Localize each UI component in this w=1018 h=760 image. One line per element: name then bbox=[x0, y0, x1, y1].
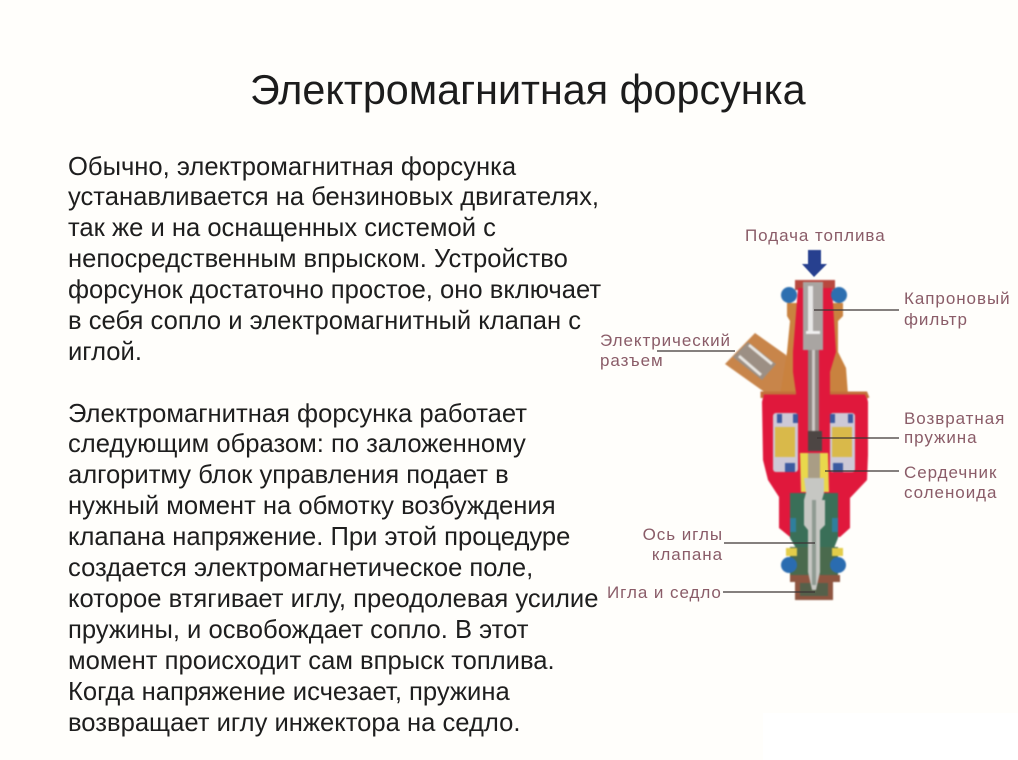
label: electrical connector: Электрический bbox=[600, 331, 731, 350]
text block: intro paragraph: Обычно, электромагнитная форсунка bbox=[68, 152, 516, 180]
orange sleeve bbox=[780, 303, 848, 395]
icon: fuel supply arrow bbox=[802, 250, 827, 277]
top cap bbox=[795, 280, 835, 290]
right solenoid coil bbox=[830, 413, 855, 472]
text block: intro paragraph: непосредственным впрыском. Устройство bbox=[68, 245, 568, 273]
text block: how it works paragraph: Когда напряжение исчезает, пружина bbox=[68, 678, 510, 706]
text block: how it works paragraph: алгоритму блок управления подает в bbox=[68, 461, 509, 489]
filter and needle shaft bbox=[803, 282, 823, 350]
electrical connector bbox=[725, 333, 800, 398]
injector body bbox=[725, 280, 868, 600]
label: needle axis: Ось иглы bbox=[643, 525, 723, 544]
label: electrical connector: разъем bbox=[600, 351, 664, 370]
text block: how it works paragraph: момент происходит сам впрыск топлива. bbox=[68, 647, 555, 675]
text block: how it works paragraph: следующим образом: по заложенному bbox=[68, 430, 526, 458]
left solenoid coil bbox=[773, 413, 798, 472]
text block: intro paragraph: в себя сопло и электромагнитный клапан с bbox=[68, 307, 581, 335]
text block: how it works paragraph: возвращает иглу инжектора на седло. bbox=[68, 709, 520, 737]
orange top edge of housing bbox=[762, 393, 868, 398]
label: nylon filter: Капроновый bbox=[904, 289, 1011, 308]
red housing bbox=[762, 288, 868, 537]
green lower body bbox=[790, 493, 838, 548]
text block: intro paragraph: форсунок достаточно простое, оно включает bbox=[68, 276, 601, 304]
text block: how it works paragraph: клапана напряжение. При этой процедуре bbox=[68, 523, 570, 551]
solenoid core bbox=[800, 453, 829, 492]
label: return spring: пружина bbox=[904, 428, 978, 447]
o-rings upper bbox=[781, 287, 797, 303]
text block: intro paragraph: устанавливается на бензиновых двигателях, bbox=[68, 183, 599, 211]
needle bbox=[804, 478, 825, 590]
label: fuel supply: Подача топлива bbox=[745, 226, 886, 245]
return spring bbox=[808, 431, 822, 451]
text block: how it works paragraph bbox=[68, 400, 598, 737]
text block: how it works paragraph: которое втягивает иглу, преодолевая усилие bbox=[68, 585, 598, 613]
label: nylon filter: фильтр bbox=[904, 310, 968, 329]
text block: how it works paragraph: нужный момент на обмотку возбуждения bbox=[68, 492, 556, 520]
label: return spring: Возвратная bbox=[904, 409, 1005, 428]
text block: how it works paragraph: создается электромагнетическое поле, bbox=[68, 554, 533, 582]
leader lines bbox=[657, 310, 899, 592]
label: solenoid core: Сердечник bbox=[904, 463, 997, 482]
title: Электромагнитная форсунка bbox=[250, 67, 806, 113]
text block: intro paragraph: так же и на оснащенных системой с bbox=[68, 214, 496, 242]
white patch bottom right bbox=[763, 713, 1018, 760]
label: needle axis: клапана bbox=[652, 545, 723, 564]
label: solenoid core: соленоида bbox=[904, 483, 997, 502]
label: needle and seat: Игла и седло bbox=[607, 583, 722, 602]
text block: how it works paragraph: Электромагнитная форсунка работает bbox=[68, 400, 527, 428]
text block: intro paragraph: иглой. bbox=[68, 338, 142, 366]
yellow rings bbox=[786, 548, 797, 556]
o-rings lower bbox=[781, 557, 797, 573]
text block: intro paragraph bbox=[68, 152, 601, 366]
text block: how it works paragraph: пружины, и освобождает сопло. В этот bbox=[68, 616, 529, 644]
nozzle bbox=[790, 547, 838, 576]
